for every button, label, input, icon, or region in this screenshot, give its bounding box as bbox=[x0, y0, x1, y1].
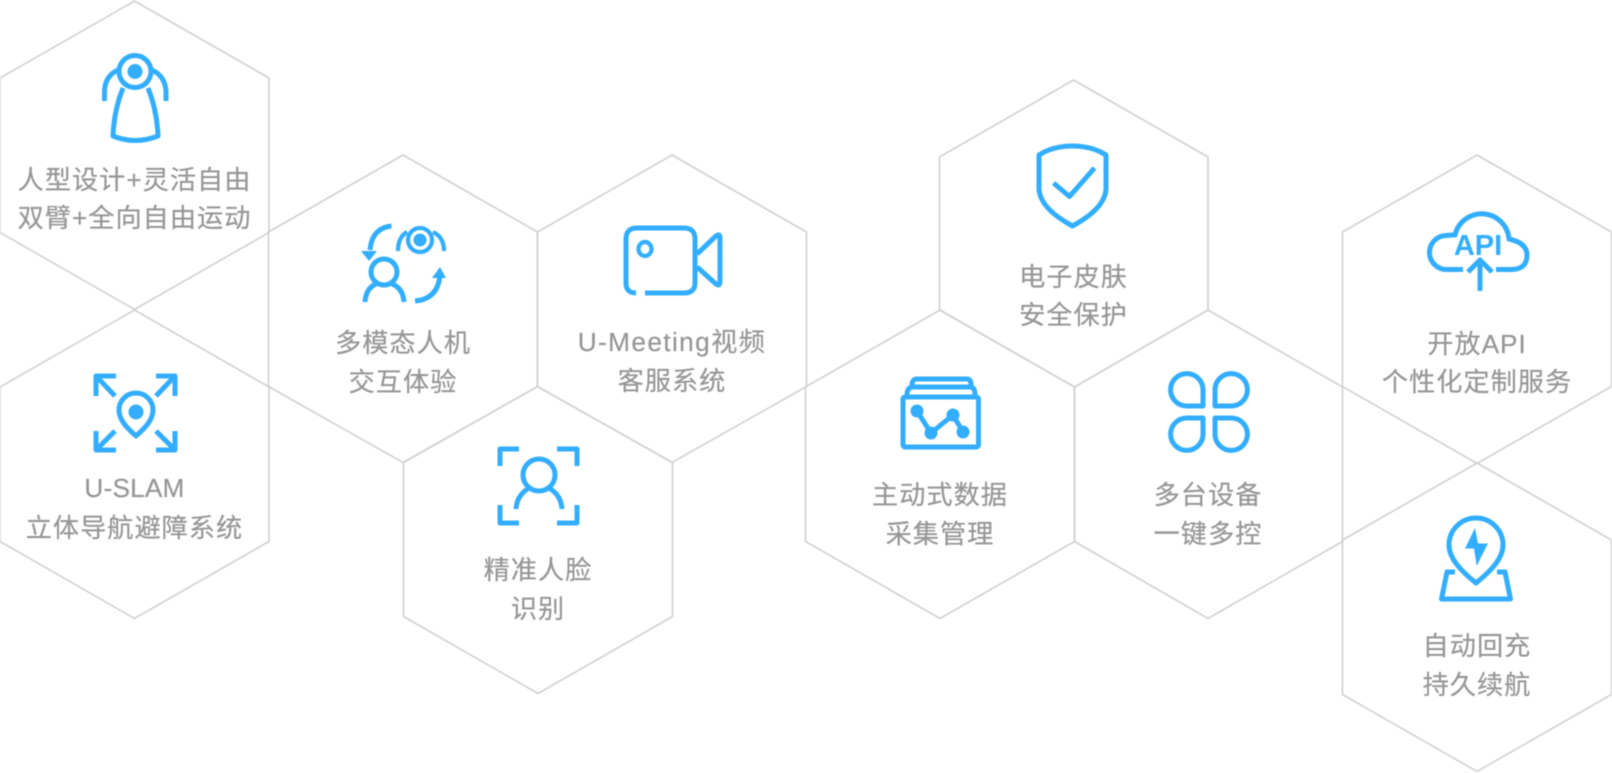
panel: humanoid design bbox=[0, 1, 269, 310]
hexagon outline bbox=[806, 310, 1074, 618]
panel: active data collection bbox=[806, 310, 1074, 618]
label: U-Meeting视频 bbox=[578, 327, 766, 357]
label: 持久续航 bbox=[1423, 670, 1531, 700]
panel: open API bbox=[1342, 155, 1612, 464]
icon: API cloud upload bbox=[1429, 214, 1527, 291]
hexagon outline bbox=[0, 310, 269, 618]
label bbox=[18, 165, 251, 233]
label bbox=[1423, 631, 1531, 700]
hexagon outline bbox=[268, 155, 538, 462]
icon: face scan bbox=[500, 449, 577, 523]
icon: four-petal grid bbox=[1171, 374, 1247, 450]
label: 交互体验 bbox=[349, 367, 457, 397]
label bbox=[26, 473, 243, 543]
icon: API cloud upload: API bbox=[1454, 230, 1502, 262]
hexagon outline bbox=[1342, 155, 1612, 464]
label: 双臂+全向自由运动 bbox=[18, 203, 251, 233]
label bbox=[1382, 329, 1572, 397]
hexagon outline bbox=[538, 155, 806, 462]
hexagon outline bbox=[0, 1, 269, 310]
hexagon outline bbox=[404, 386, 672, 694]
label: 多模态人机 bbox=[335, 328, 471, 358]
label: 精准人脸 bbox=[484, 555, 592, 585]
label: 人型设计+灵活自由 bbox=[18, 165, 251, 195]
label: 多台设备 bbox=[1154, 480, 1262, 510]
label bbox=[335, 328, 471, 397]
label: 主动式数据 bbox=[872, 480, 1008, 510]
label: 识别 bbox=[511, 594, 565, 624]
panel: auto recharge bbox=[1342, 463, 1612, 772]
label bbox=[578, 327, 766, 396]
icon: location with expanding arrows bbox=[96, 376, 175, 450]
panel: electronic skin bbox=[940, 80, 1208, 387]
panel: face recognition bbox=[404, 386, 672, 694]
label: 一键多控 bbox=[1154, 519, 1262, 549]
label: 立体导航避障系统 bbox=[26, 513, 243, 543]
label bbox=[1019, 262, 1128, 330]
label bbox=[484, 555, 592, 624]
icon: data cards with chart bbox=[903, 379, 978, 447]
icon: charging location bbox=[1442, 518, 1510, 599]
label: 客服系统 bbox=[618, 366, 726, 396]
label: 自动回充 bbox=[1423, 631, 1531, 661]
hexagon outline bbox=[1342, 463, 1612, 772]
icon: video camera bbox=[626, 228, 720, 293]
label: 安全保护 bbox=[1019, 300, 1128, 330]
label: 采集管理 bbox=[886, 519, 994, 549]
label: 电子皮肤 bbox=[1019, 262, 1128, 292]
label bbox=[872, 480, 1008, 549]
panel: U-Meeting bbox=[538, 155, 806, 462]
label: 个性化定制服务 bbox=[1382, 367, 1572, 397]
label: U-SLAM bbox=[84, 473, 185, 503]
panel: U-SLAM bbox=[0, 310, 269, 618]
icon: robot bbox=[104, 56, 166, 140]
label: 开放API bbox=[1427, 329, 1527, 359]
label bbox=[1154, 480, 1262, 549]
panel: multi-device control bbox=[1074, 310, 1342, 618]
icon: shield with check bbox=[1039, 146, 1106, 226]
icon: robot and person exchange bbox=[361, 226, 446, 302]
hexagon outline bbox=[1074, 310, 1342, 618]
panel: multimodal interaction bbox=[268, 155, 538, 462]
hexagon outline bbox=[940, 80, 1208, 387]
